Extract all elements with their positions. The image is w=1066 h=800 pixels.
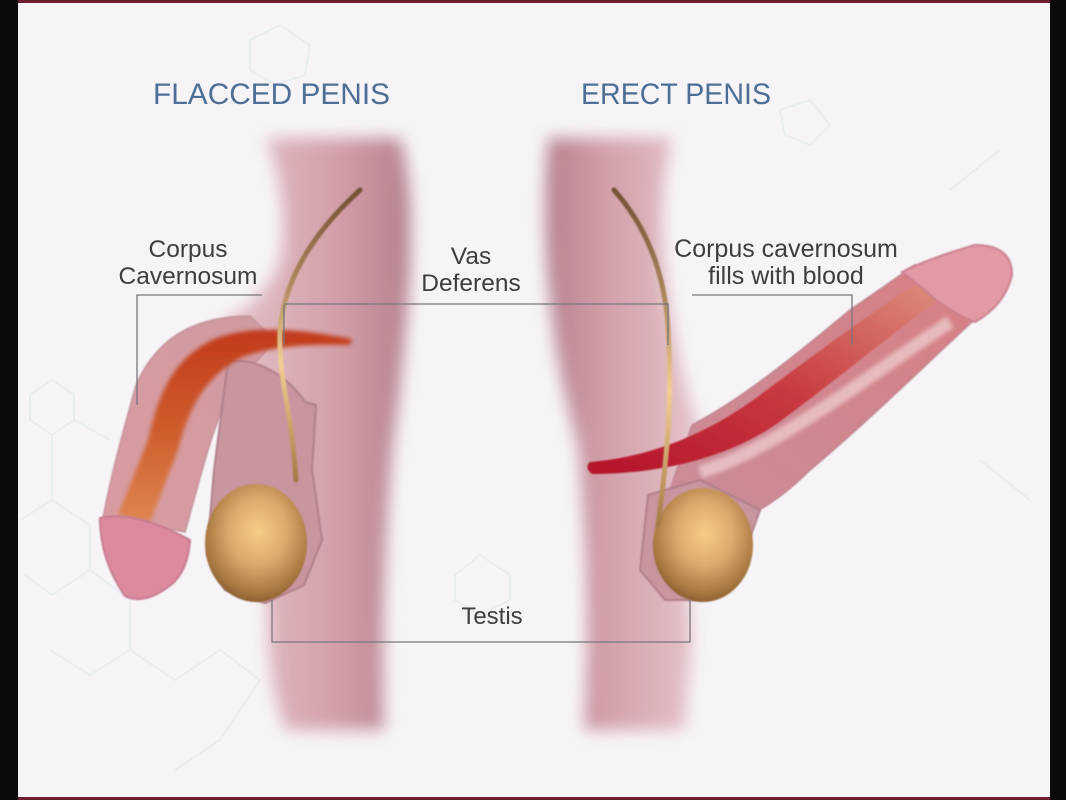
vas deferens: flaccid — [280, 190, 360, 480]
vas deferens: erect — [614, 190, 670, 525]
label: testis: Testis — [461, 603, 523, 630]
label: vas deferens: Vas — [451, 243, 491, 270]
label: corpus cavernosum: Corpus — [149, 236, 227, 263]
testis: flaccid — [205, 484, 307, 602]
torso: flaccid — [222, 138, 411, 730]
organ: flaccid shaft — [103, 316, 275, 532]
heading: erect: ERECT PENIS — [581, 78, 771, 111]
panel: flaccid diagram — [100, 138, 411, 730]
testis: erect — [653, 488, 753, 602]
torso: erect — [545, 138, 698, 730]
leader lines — [137, 295, 852, 642]
glans: flaccid — [100, 516, 190, 599]
panel: erect diagram — [545, 138, 1012, 730]
label: corpus cavernosum fills with blood: fills with blood — [708, 262, 864, 290]
organ: erect shaft — [670, 265, 985, 515]
label: corpus cavernosum: Cavernosum — [119, 263, 257, 290]
underside highlight: erect shaft — [700, 322, 950, 472]
label: vas deferens: Deferens — [421, 270, 521, 297]
label: corpus cavernosum fills with blood: Corpus cavernosum — [674, 235, 898, 263]
scrotum: flaccid — [207, 361, 322, 603]
scrotum: erect — [640, 480, 760, 600]
corpus cavernosum: erect — [587, 278, 945, 474]
glans: erect — [902, 245, 1012, 322]
corpus cavernosum: flaccid — [118, 330, 352, 522]
heading: flaccid: FLACCED PENIS — [153, 78, 390, 111]
